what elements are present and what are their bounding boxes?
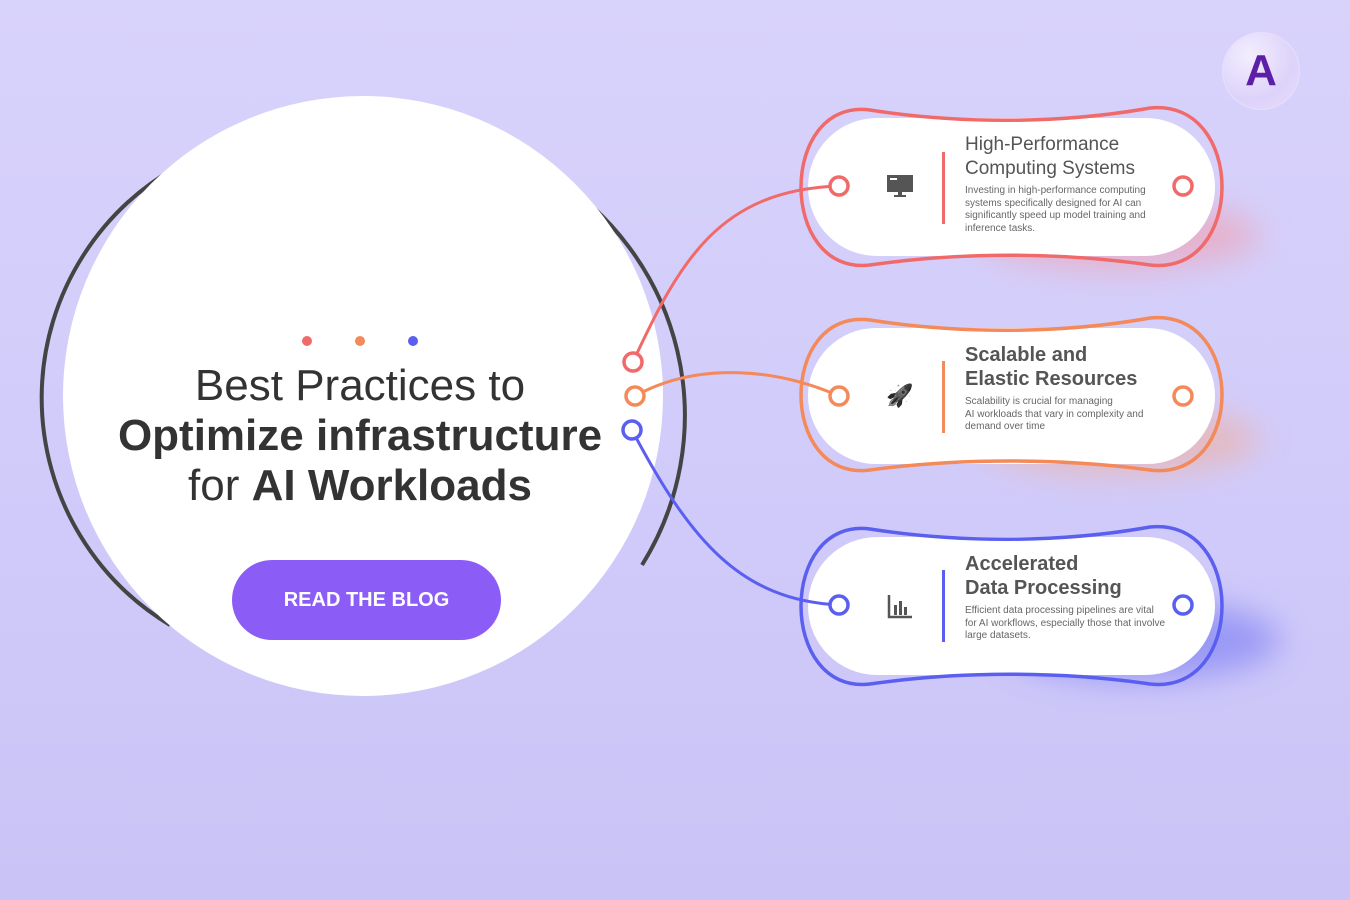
text: large datasets. bbox=[965, 630, 1031, 641]
connectors bbox=[633, 186, 839, 362]
text: for AI workflows, especially those that involve bbox=[965, 618, 1165, 628]
dark ring arcs bbox=[42, 168, 685, 625]
dots bbox=[302, 336, 418, 346]
text: Scalable and bbox=[965, 344, 1087, 366]
title: Best Practices to bbox=[195, 361, 525, 410]
text: demand over time bbox=[965, 421, 1045, 432]
title bbox=[118, 361, 602, 510]
text: Data Processing bbox=[965, 577, 1122, 599]
button bbox=[232, 560, 501, 640]
title: for AI Workloads bbox=[188, 461, 532, 510]
icon: rocket: 🚀 bbox=[886, 383, 914, 408]
text: Investing in high-performance computing systems specifically designed for AI can significantly speed up model training and inference tasks. bbox=[965, 185, 1146, 234]
text: Elastic Resources bbox=[965, 368, 1137, 390]
icon: monitor bbox=[887, 175, 913, 197]
text: Efficient data processing pipelines are vital bbox=[965, 605, 1154, 616]
logo bubble bbox=[1222, 32, 1300, 110]
white circle bbox=[63, 96, 663, 696]
text: Computing Systems bbox=[965, 158, 1135, 179]
card glows bbox=[980, 200, 1260, 270]
card 1 content bbox=[887, 134, 1146, 234]
text: Scalability is crucial for managing bbox=[965, 396, 1113, 407]
card 2 content bbox=[886, 344, 1143, 433]
text: Accelerated bbox=[965, 553, 1078, 575]
title: Optimize infrastructure bbox=[118, 411, 602, 460]
text: AI workloads that vary in complexity and bbox=[965, 408, 1143, 420]
card 3 content bbox=[888, 553, 1165, 642]
icon: bar chart bbox=[888, 595, 912, 618]
card outlines bbox=[801, 108, 1222, 265]
text: High-Performance bbox=[965, 134, 1119, 155]
button: READ THE BLOG bbox=[284, 589, 449, 611]
logo bubble: A bbox=[1245, 46, 1277, 95]
